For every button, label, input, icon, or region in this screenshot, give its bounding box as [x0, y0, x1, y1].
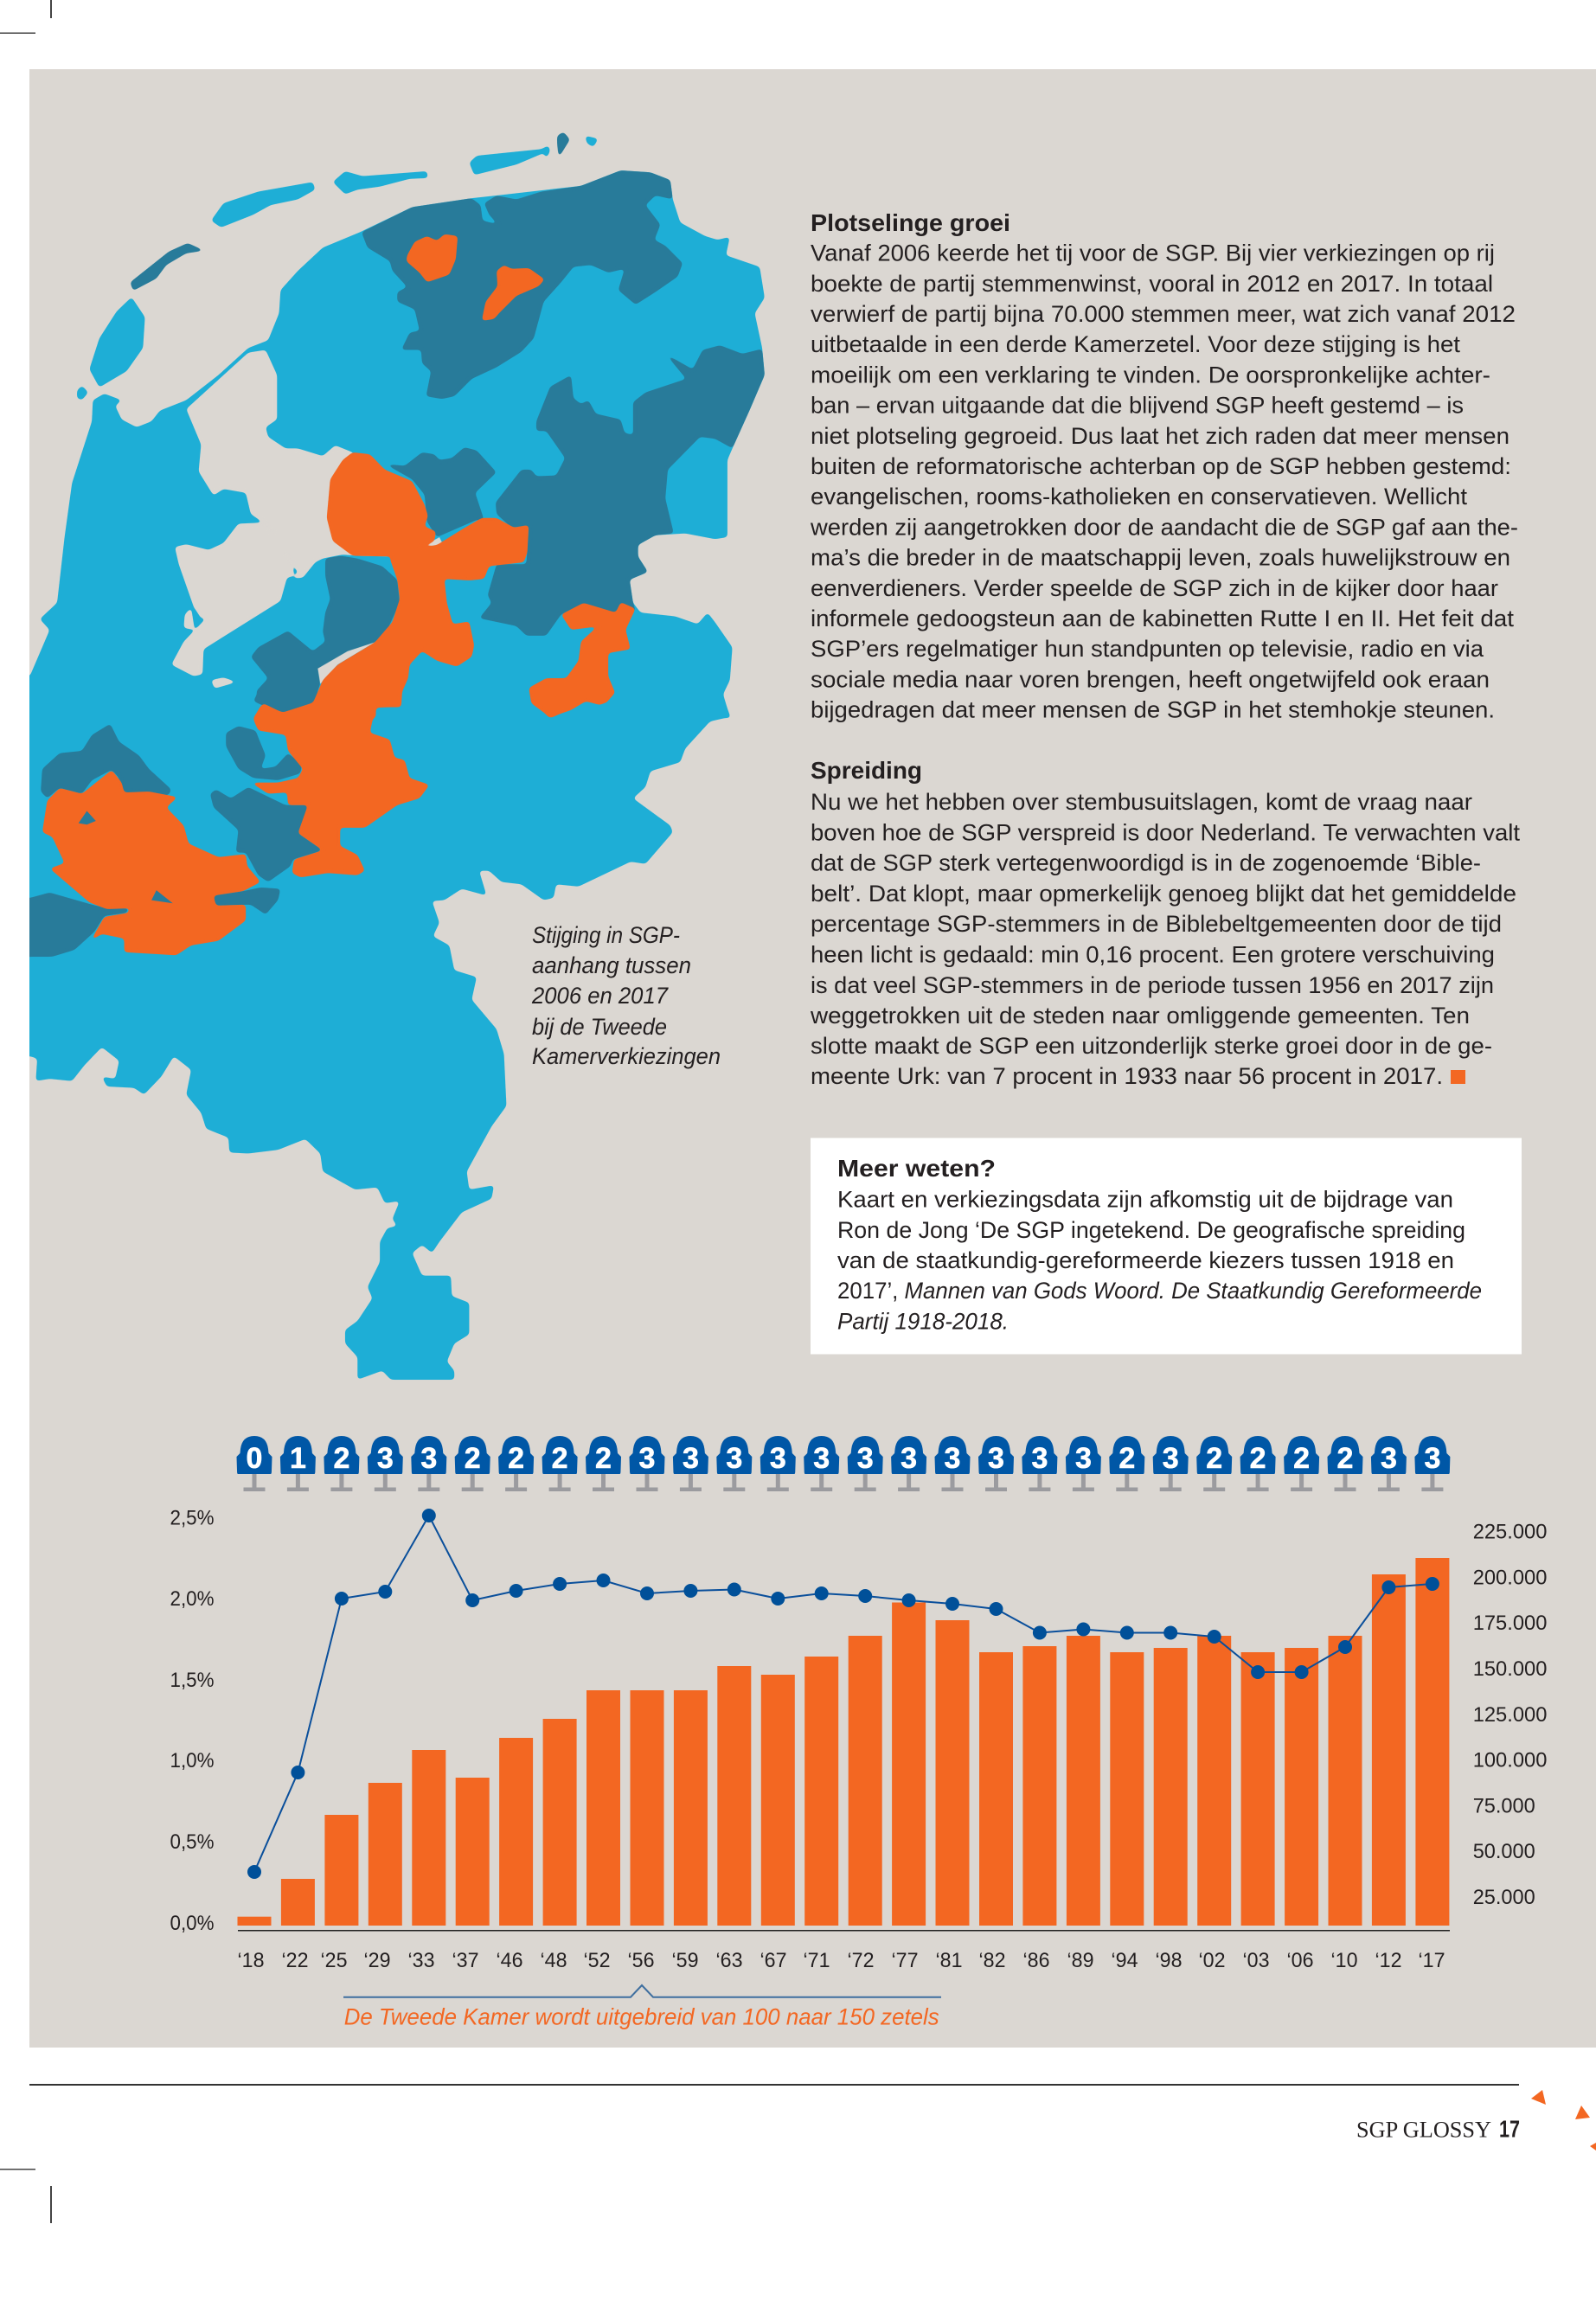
line: vote share: [247, 1509, 1439, 1879]
seat pins row: 3: [683, 1442, 699, 1475]
seat pins row: 3: [377, 1442, 394, 1475]
body text: boekte de partij stemmenwinst, vooral in 2012 en 2017. In totaal: [811, 271, 1493, 297]
year labels: ‘56: [628, 1949, 654, 1972]
year labels: ‘03: [1242, 1949, 1270, 1972]
right axis labels: 225.000: [1473, 1521, 1547, 1544]
body text: verwierf de partij bijna 70.000 stemmen meer, wat zich vanaf 2012: [811, 301, 1516, 327]
footer text: SGP GLOSSY: [1356, 2118, 1491, 2143]
year labels: ‘02: [1199, 1949, 1225, 1972]
seat pins row: 2: [1118, 1442, 1135, 1475]
year labels: ‘46: [497, 1949, 522, 1972]
body text: moeilijk om een verklaring te vinden. De oorspronkelijke achter-: [811, 362, 1490, 388]
body text: sociale media naar voren brengen, heeft ongetwijfeld ook eraan: [811, 666, 1490, 692]
water: IJsselmeer and Markermeer: [171, 350, 392, 689]
left axis labels: [170, 1507, 215, 1935]
year labels: ‘59: [671, 1949, 699, 1972]
body text: dat de SGP sterk vertegenwoordigd is in de zogenoemde ‘Bible-: [811, 850, 1481, 876]
callout text: [837, 1187, 1482, 1335]
seat pins row: 3: [857, 1442, 874, 1475]
right axis labels: 175.000: [1473, 1612, 1547, 1635]
year labels: ‘17: [1419, 1949, 1445, 1972]
seat pins row: [237, 1436, 1450, 1491]
seat pins row: 2: [552, 1442, 568, 1475]
year labels: ‘81: [936, 1949, 962, 1972]
callout: Meer weten?: [811, 1138, 1522, 1355]
year labels: ‘94: [1111, 1949, 1138, 1972]
map caption: [531, 922, 721, 1069]
seat pins row: 3: [1381, 1442, 1397, 1475]
callout heading: Meer weten?: [837, 1155, 996, 1182]
year labels: ‘48: [540, 1949, 567, 1972]
body text: eenverdieners. Verder speelde de SGP zich in de kijker door haar: [811, 575, 1498, 601]
year labels: ‘63: [716, 1949, 742, 1972]
year labels: [237, 1949, 1445, 1972]
right axis labels: 150.000: [1473, 1657, 1547, 1681]
map caption: Stijging in SGP-: [532, 922, 680, 948]
right axis labels: 50.000: [1473, 1840, 1535, 1863]
right axis labels: 75.000: [1473, 1794, 1535, 1817]
seat pins row: 2: [333, 1442, 349, 1475]
map caption: 2006 en 2017: [531, 983, 669, 1009]
baseline: [238, 1930, 1450, 1931]
left axis labels: 0,5%: [170, 1830, 215, 1854]
year labels: ‘52: [583, 1949, 611, 1972]
body text: ban – ervan uitgaande dat die blijvend SGP heeft gestemd – is: [811, 393, 1464, 419]
seat pins row: 3: [1075, 1442, 1092, 1475]
body text: percentage SGP-stemmers in de Biblebeltgemeenten door de tijd: [811, 911, 1502, 937]
crop marks: [0, 0, 52, 2223]
year labels: ‘22: [282, 1949, 308, 1972]
dark spots inside the orange region: [79, 811, 173, 903]
body text: slotte maakt de SGP een uitzonderlijk sterke groei door in de ge-: [811, 1033, 1492, 1059]
body text: SGP’ers regelmatiger hun standpunten op televisie, radio en via: [811, 636, 1484, 662]
year labels: ‘72: [848, 1949, 874, 1972]
left axis labels: 1,5%: [170, 1669, 215, 1692]
body text: belt’. Dat klopt, maar opmerkelijk genoeg blijkt dat het gemiddelde: [811, 881, 1516, 907]
body text: bijgedragen dat meer mensen de SGP in het stemhokje steunen.: [811, 697, 1495, 723]
body text: [810, 240, 1518, 723]
seat pins row: 3: [988, 1442, 1004, 1475]
seat pins row: 3: [813, 1442, 830, 1475]
right axis labels: 100.000: [1473, 1749, 1547, 1772]
year labels: ‘77: [891, 1949, 919, 1972]
left axis labels: 1,0%: [170, 1749, 215, 1772]
chart: SGP seats, vote share and votes: [170, 1436, 1547, 2030]
seat pins row: 2: [465, 1442, 481, 1475]
year labels: ‘29: [363, 1949, 391, 1972]
right axis labels: 200.000: [1473, 1566, 1547, 1589]
footer: [29, 2084, 1596, 2150]
water slivers: [317, 537, 443, 684]
left axis labels: 2,5%: [170, 1507, 215, 1529]
body text: evangelischen, rooms-katholieken en conservatieven. Wellicht: [811, 484, 1467, 510]
seat pins row: 3: [639, 1442, 655, 1475]
end mark: [1451, 1070, 1465, 1084]
heading: Plotselinge groei: [811, 209, 1010, 236]
year labels: ‘71: [803, 1949, 830, 1972]
map caption: Kamerverkiezingen: [532, 1043, 721, 1069]
year labels: ‘86: [1022, 1949, 1050, 1972]
body text: heen licht is gedaald: min 0,16 procent. Een grotere verschuiving: [811, 941, 1495, 967]
seat pins row: 3: [1163, 1442, 1179, 1475]
body text: is dat veel SGP-stemmers in de periode tussen 1956 en 2017 zijn: [811, 972, 1494, 998]
callout text: van de staatkundig-gereformeerde kiezers tussen 1918 en: [837, 1247, 1454, 1273]
seat pins row: 2: [1293, 1442, 1310, 1475]
year labels: ‘89: [1067, 1949, 1093, 1972]
article section: Plotselinge groei: [810, 209, 1518, 723]
body text: weggetrokken uit de steden naar omliggende gemeenten. Ten: [810, 1003, 1470, 1029]
callout text: Partij 1918-2018.: [837, 1309, 1009, 1335]
body text: [810, 789, 1521, 1089]
body text: Nu we het hebben over stembusuitslagen, komt de vraag naar: [811, 789, 1472, 815]
seat pins row: 3: [901, 1442, 917, 1475]
bracket annotation: De Tweede Kamer wordt uitgebreid van 100 naar 150 zetels: [344, 2004, 939, 2030]
year labels: ‘98: [1156, 1949, 1182, 1972]
seat pins row: 3: [726, 1442, 742, 1475]
article section: Spreiding: [810, 757, 1521, 1089]
orange regions: [42, 234, 636, 955]
left axis labels: 0,0%: [170, 1912, 215, 1935]
seat pins row: 3: [770, 1442, 786, 1475]
body text: werden zij aangetrokken door de aandacht die de SGP gaf aan the-: [810, 514, 1518, 540]
land: [0, 136, 765, 1380]
decorative orange triangles: [1531, 2090, 1596, 2150]
left axis labels: 2,0%: [170, 1587, 215, 1611]
seat pins row: 3: [945, 1442, 960, 1475]
year labels: ‘10: [1330, 1949, 1358, 1972]
callout text: 2017’, Mannen van Gods Woord. De Staatkundig Gereformeerde: [837, 1278, 1482, 1304]
right axis labels: 125.000: [1473, 1703, 1547, 1727]
map of the Netherlands: [0, 131, 765, 1380]
seat pins row: 2: [1337, 1442, 1353, 1475]
seat pins row: 2: [1206, 1442, 1222, 1475]
heading: Spreiding: [811, 757, 922, 784]
seat pins row: 2: [595, 1442, 612, 1475]
year labels: ‘06: [1287, 1949, 1313, 1972]
map caption: bij de Tweede: [532, 1014, 667, 1040]
page number: 17: [1499, 2116, 1520, 2143]
seat pins row: 2: [1250, 1442, 1266, 1475]
body text: informele gedoogsteun aan de kabinetten Rutte I en II. Het feit dat: [811, 606, 1515, 631]
callout text: Kaart en verkiezingsdata zijn afkomstig uit de bijdrage van: [837, 1187, 1453, 1213]
seat pins row: 3: [420, 1442, 437, 1475]
callout text: Ron de Jong ‘De SGP ingetekend. De geografische spreiding: [837, 1217, 1465, 1243]
year labels: ‘82: [979, 1949, 1005, 1972]
bracket annotation: [343, 1985, 941, 2030]
year labels: ‘37: [452, 1949, 479, 1972]
dark blue regions: [0, 131, 765, 964]
bars: votes: [237, 1558, 1449, 1926]
year labels: ‘67: [760, 1949, 787, 1972]
body text: boven hoe de SGP verspreid is door Nederland. Te verwachten valt: [811, 819, 1521, 845]
body text: ma’s die breder in de maatschappij leven, zoals huwelijkstrouw en: [811, 545, 1510, 571]
map caption: aanhang tussen: [532, 952, 691, 978]
seat pins row: 2: [508, 1442, 524, 1475]
body text: buiten de reformatorische achterban op de SGP hebben gestemd:: [811, 453, 1511, 479]
right axis labels: [1473, 1521, 1547, 1909]
body text: niet plotseling gegroeid. Dus laat het zich raden dat meer mensen: [811, 423, 1509, 449]
body text: meente Urk: van 7 procent in 1933 naar 56 procent in 2017.: [811, 1063, 1443, 1089]
year labels: ‘12: [1375, 1949, 1401, 1972]
right axis labels: 25.000: [1473, 1886, 1535, 1909]
seat pins row: 3: [1031, 1442, 1048, 1475]
seat pins row: 3: [1424, 1442, 1440, 1475]
year labels: ‘18: [237, 1949, 265, 1972]
seat pins row: 1: [290, 1442, 306, 1475]
body text: Vanaf 2006 keerde het tij voor de SGP. Bij vier verkiezingen op rij: [811, 240, 1495, 266]
body text: uitbetaalde in een derde Kamerzetel. Voor deze stijging is het: [811, 331, 1460, 357]
seat pins row: 0: [247, 1442, 262, 1475]
year labels: ‘25: [320, 1949, 348, 1972]
year labels: ‘33: [408, 1949, 434, 1972]
